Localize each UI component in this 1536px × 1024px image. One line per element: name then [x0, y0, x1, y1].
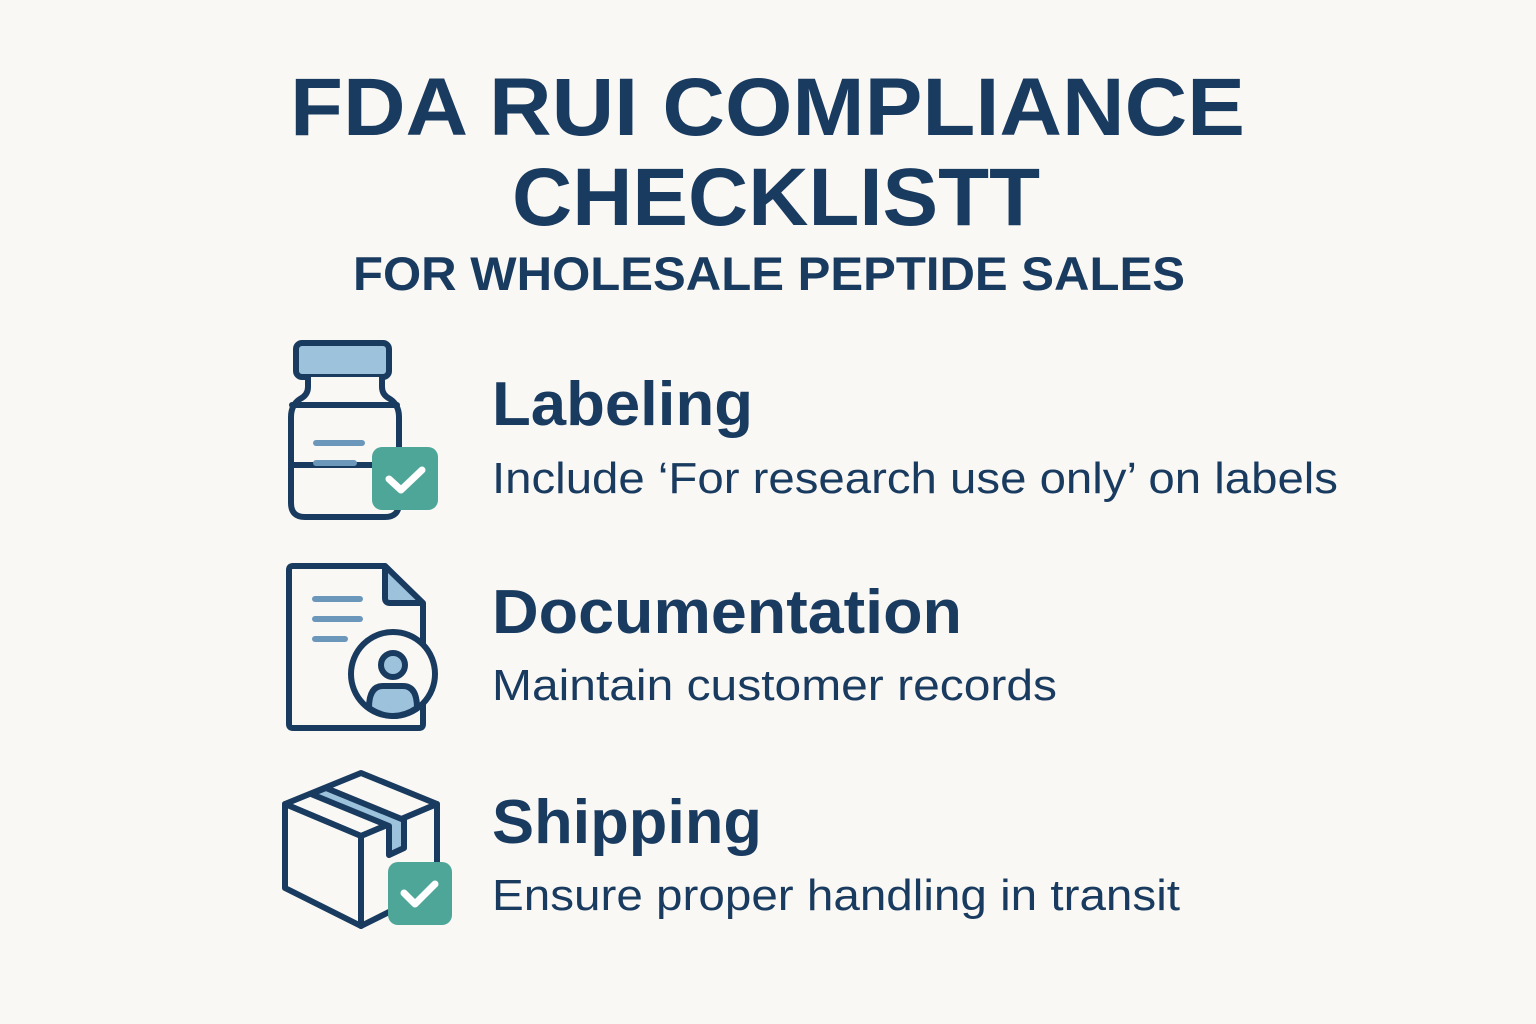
subtitle: FOR WHOLESALE PEPTIDE SALES: [353, 247, 1185, 300]
title: CHECKLISTT: [512, 152, 1040, 243]
description: Include ‘For research use only’ on labels: [492, 454, 1338, 503]
heading: Documentation: Documentation: [492, 578, 962, 647]
item: documentation: [289, 566, 1057, 728]
item: labeling: [291, 343, 1338, 517]
icon: document with user: [289, 566, 435, 728]
icon: box with check: [285, 773, 452, 926]
heading: Labeling: Labeling: [492, 370, 753, 439]
heading: Shipping: Shipping: [492, 788, 762, 857]
title: FDA RUI COMPLIANCE: [290, 62, 1245, 153]
title: [290, 62, 1245, 243]
icon: jar with check: [291, 343, 438, 517]
item: shipping: [285, 773, 1180, 926]
description: Ensure proper handling in transit: [492, 871, 1180, 920]
description: Maintain customer records: [492, 661, 1057, 710]
